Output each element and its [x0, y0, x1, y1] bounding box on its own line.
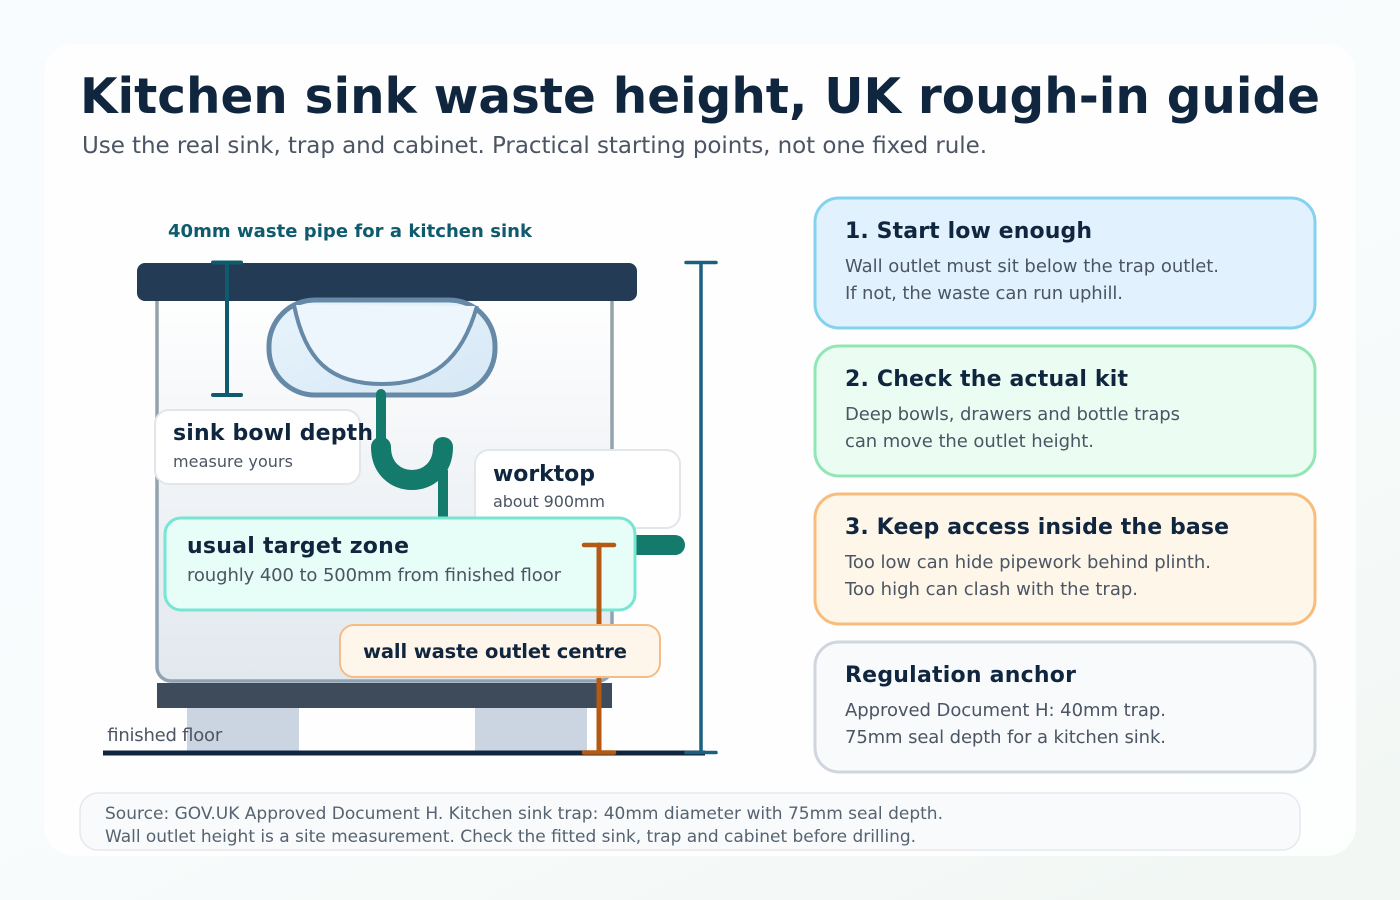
callout: usual target zone: usual target zone: [187, 534, 409, 559]
panel: check the actual kit: can move the outlet height.: [845, 431, 1094, 452]
callout: sink bowl depth: [155, 410, 373, 484]
sink bowl depth dimension: [213, 262, 241, 395]
panel: regulation anchor: 75mm seal depth for a kitchen sink.: [845, 727, 1166, 748]
trap pipework: [381, 394, 675, 545]
subtitle: Use the real sink, trap and cabinet. Practical starting points, not one fixed rule.: [82, 133, 987, 159]
panel: start low enough: Wall outlet must sit below the trap outlet.: [845, 256, 1219, 277]
panel: keep access inside the base: 3. Keep access inside the base: [845, 515, 1229, 540]
callout: sink bowl depth: sink bowl depth: [173, 421, 373, 446]
title: Kitchen sink waste height, UK rough-in guide: [80, 68, 1320, 125]
panel: start low enough: [815, 198, 1315, 328]
floor line: [103, 750, 705, 756]
source note: Wall outlet height is a site measurement. Check the fitted sink, trap and cabinet before drilling.: [105, 827, 916, 847]
callout: wall waste outlet centre: [340, 625, 660, 677]
outlet height dimension: [584, 545, 614, 752]
callout: wall waste outlet centre: wall waste outlet centre: [363, 640, 627, 663]
panel: check the actual kit: 2. Check the actual kit: [845, 367, 1128, 392]
callout: usual target zone: roughly 400 to 500mm from finished floor: [187, 565, 562, 586]
worktop: [137, 263, 637, 301]
finished floor label: finished floor: [107, 725, 223, 746]
panel: keep access inside the base: [815, 494, 1315, 624]
callout: worktop: [475, 450, 680, 528]
pipe label: 40mm waste pipe for a kitchen sink: [168, 221, 533, 242]
right cabinet foot: [475, 708, 587, 752]
worktop height dimension: [686, 262, 716, 752]
callout: worktop: about 900mm: [493, 492, 605, 511]
panel: regulation anchor: Approved Document H: 40mm trap.: [845, 700, 1166, 721]
cabinet body: [157, 285, 612, 681]
panel: keep access inside the base: Too high can clash with the trap.: [844, 579, 1138, 600]
sink basin: [269, 300, 495, 395]
panel: regulation anchor: [815, 642, 1315, 772]
source note: [80, 793, 1300, 850]
panel: regulation anchor: Regulation anchor: [845, 663, 1076, 688]
left cabinet foot: [187, 708, 299, 752]
callout: worktop: worktop: [493, 462, 595, 487]
panel: check the actual kit: [815, 346, 1315, 476]
callout: usual target zone: [165, 518, 635, 610]
panel: start low enough: 1. Start low enough: [845, 219, 1092, 244]
diagram: sink and cabinet cross-section: [103, 221, 716, 756]
plinth: [157, 683, 612, 708]
callout: sink bowl depth: measure yours: [173, 452, 293, 471]
panel: check the actual kit: Deep bowls, drawers and bottle traps: [845, 404, 1180, 425]
source note: Source: GOV.UK Approved Document H. Kitchen sink trap: 40mm diameter with 75mm seal depth.: [105, 804, 943, 824]
panel: keep access inside the base: Too low can hide pipework behind plinth.: [844, 552, 1211, 573]
panel: start low enough: If not, the waste can run uphill.: [845, 283, 1123, 304]
